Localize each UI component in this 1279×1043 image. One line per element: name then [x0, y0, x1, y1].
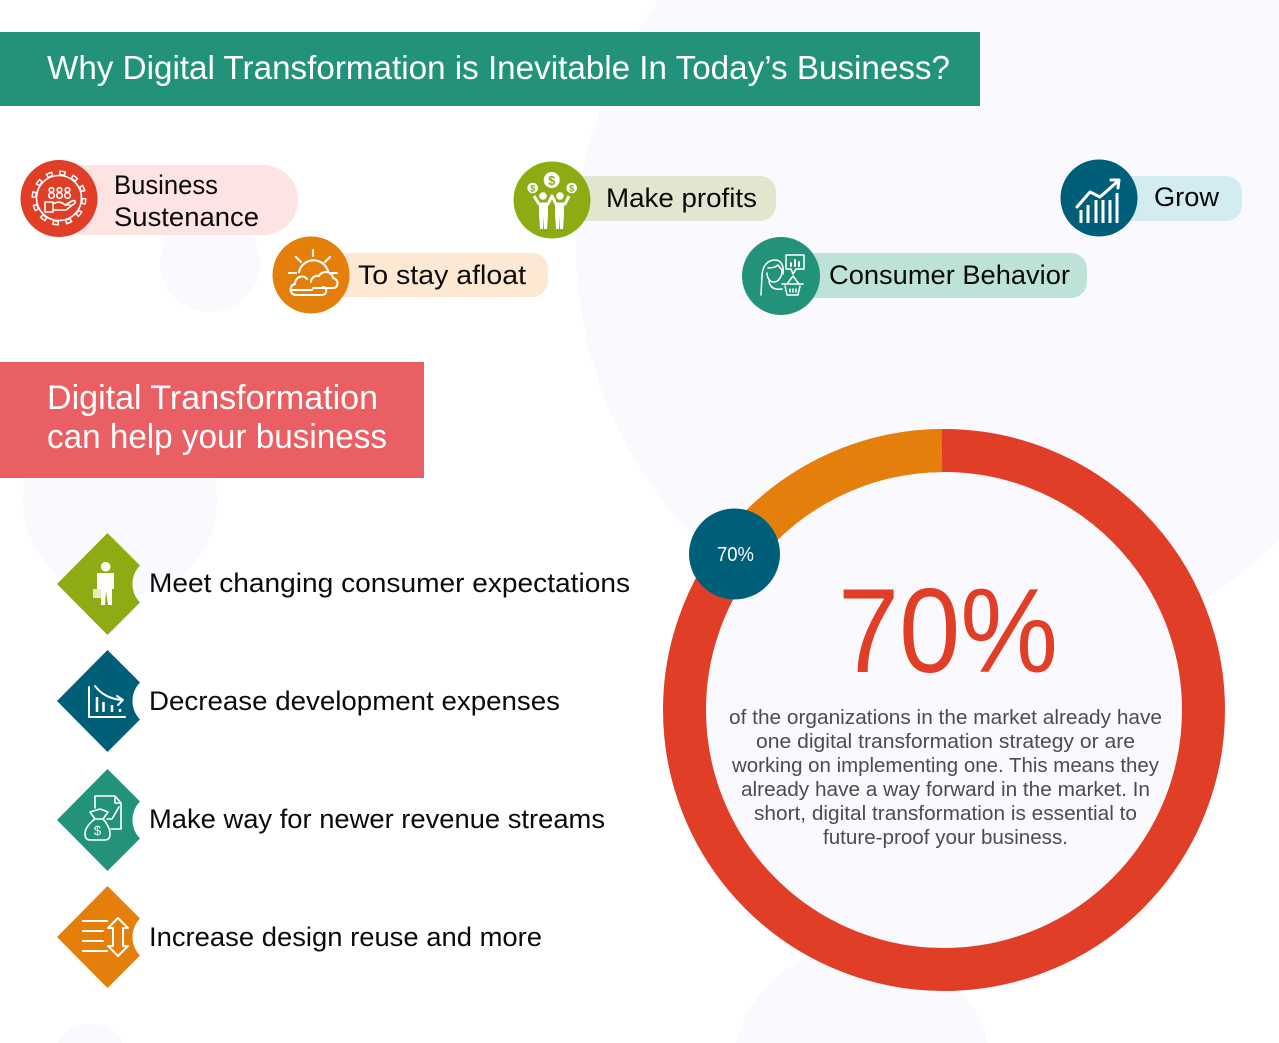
icon: two people with dollar coins: $: [548, 173, 556, 188]
description text: working on implementing one. This means they: [731, 755, 1159, 777]
reason: grow: [1060, 160, 1242, 236]
reason: consumer behavior: [742, 237, 1087, 315]
benefit: increase design reuse and more: Increase design reuse and more: [149, 922, 542, 952]
icon: two people with dollar coins: $: [530, 184, 535, 194]
section heading banner: can help your business: [47, 418, 387, 456]
section heading banner: Digital Transformation: [47, 379, 378, 417]
benefit: make way for newer revenue streams: [57, 769, 605, 871]
benefit: increase design reuse and more: [57, 886, 542, 988]
icon: falling bar chart: [89, 686, 125, 717]
donut chart: 70 percent: [684, 450, 1204, 970]
icon: person with shopping bag: [93, 562, 114, 605]
benefit: make way for newer revenue streams: Make way for newer revenue streams: [149, 804, 605, 834]
icon: rising bar chart with arrow: [1077, 180, 1119, 223]
description text: [729, 707, 1162, 849]
benefit: meet changing consumer expectations: Meet changing consumer expectations: [149, 568, 630, 598]
reason: business sustenance: [20, 160, 298, 237]
big statistic: 70%: [838, 564, 1058, 698]
benefit: decrease development expenses: [57, 650, 560, 752]
description text: already have a way forward in the market. In: [741, 779, 1150, 801]
description text: of the organizations in the market already have: [729, 707, 1162, 729]
icon: lines with vertical double arrow: [83, 918, 128, 956]
reason: consumer behavior: Consumer Behavior: [829, 260, 1070, 290]
icon: two people with dollar coins: [527, 172, 577, 229]
icon: two people with dollar coins: $: [569, 184, 574, 194]
reason: make profits: [514, 162, 776, 238]
badge: 70%: 70%: [717, 544, 754, 566]
reason: to stay afloat: To stay afloat: [358, 260, 527, 290]
reason: business sustenance: Sustenance: [114, 202, 259, 232]
icon: sun behind clouds: [289, 250, 338, 295]
reason: make profits: Make profits: [606, 183, 757, 213]
description text: short, digital transformation is essential to: [754, 803, 1137, 825]
icon: woman with chart bubble and basket: [761, 255, 804, 295]
title banner: [0, 32, 980, 106]
description text: future-proof your business.: [823, 827, 1068, 849]
benefit: meet changing consumer expectations: [57, 533, 630, 635]
section heading banner: [0, 362, 424, 478]
reason: to stay afloat: [272, 236, 548, 314]
title banner: Why Digital Transformation is Inevitable In Today’s Business?: [47, 49, 950, 86]
icon: money bag and document: $: [94, 823, 102, 838]
icon: gear with hand and people: [34, 173, 84, 223]
badge: 70%: [689, 508, 780, 600]
reason: grow: Grow: [1154, 182, 1219, 212]
reason: business sustenance: Business: [114, 170, 218, 200]
icon: money bag and document: [85, 796, 121, 840]
benefit: decrease development expenses: Decrease development expenses: [149, 686, 560, 716]
description text: one digital transformation strategy or are: [756, 731, 1135, 753]
